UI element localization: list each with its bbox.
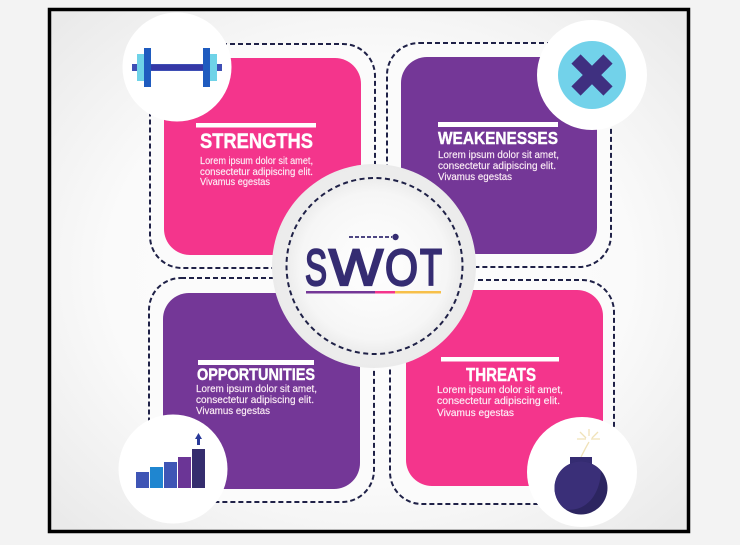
panel: opportunities [149,278,374,502]
weakenesses text [438,150,559,183]
icon: dumbbell [122,12,232,122]
tri-colour underline [306,291,441,294]
opportunities text: consectetur adipiscing elit. [196,395,314,406]
title: SWOT: O [385,239,418,296]
weakenesses heading: WEAKENESSES [438,128,558,148]
strengths text: consectetur adipiscing elit. [200,167,313,178]
strengths heading [196,123,316,153]
panel: weakenesses [387,43,611,267]
icon: bomb [527,417,637,527]
weakenesses text: consectetur adipiscing elit. [438,161,556,172]
threats text: Lorem ipsum dolor sit amet, [437,385,563,396]
strengths heading: STRENGTHS [200,130,313,153]
threats heading [441,357,559,385]
opportunities text: Lorem ipsum dolor sit amet, [196,384,317,395]
threats text: consectetur adipiscing elit. [437,396,560,407]
threats text: Vivamus egestas [437,408,514,419]
panel: threats [390,280,614,504]
title: SWOT [305,239,442,296]
center SWOT badge [272,164,476,368]
weakenesses heading [438,122,558,148]
opportunities text: Vivamus egestas [196,406,270,417]
weakenesses text: Vivamus egestas [438,172,512,183]
strengths text: Lorem ipsum dolor sit amet, [200,156,313,167]
title: SWOT: S [305,239,327,296]
dotted line above title [349,234,399,240]
opportunities heading: OPPORTUNITIES [197,366,315,384]
threats heading: THREATS [466,365,536,385]
panel: strengths [150,44,375,268]
strengths text [200,156,313,188]
weakenesses text: Lorem ipsum dolor sit amet, [438,150,559,161]
opportunities text [196,384,317,417]
title: SWOT: T [420,239,442,296]
strengths text: Vivamus egestas [200,177,270,188]
icon: rising bar chart [118,414,228,524]
title: SWOT: W [329,239,383,296]
threats text [437,385,563,419]
icon: cross [537,20,647,130]
opportunities heading [197,360,315,384]
